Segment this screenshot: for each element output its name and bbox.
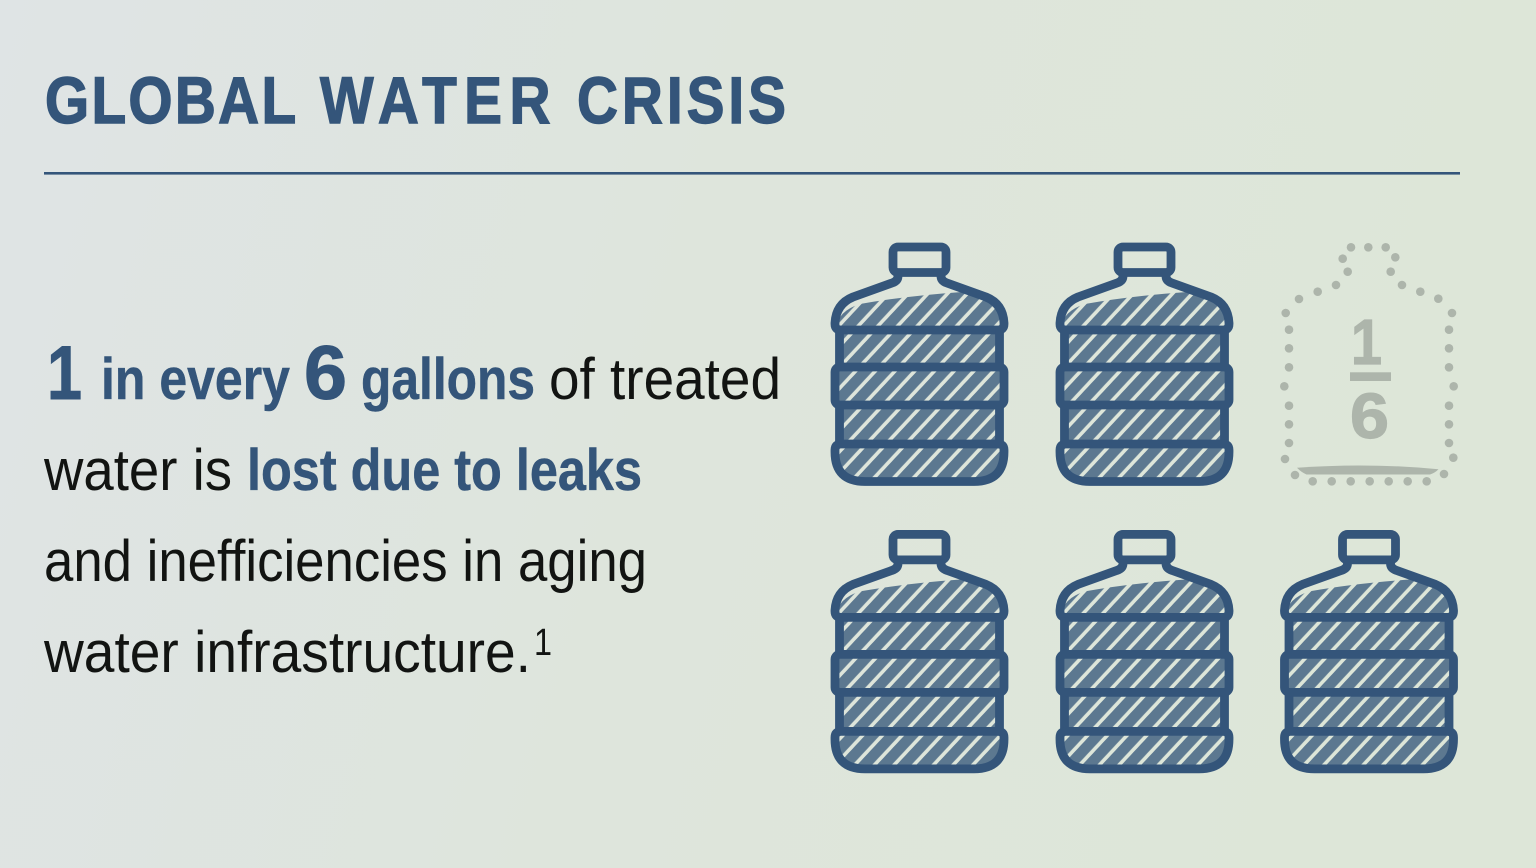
icon: dotted empty bottle with one sixth label bbox=[1280, 243, 1458, 486]
title: CRISIS bbox=[577, 64, 786, 138]
line 2: water is lost due to leaks: water is bbox=[43, 438, 232, 503]
line 1: 1 in every 6 gallons of treated: 6 bbox=[304, 331, 347, 416]
icon: full bottle 1 bbox=[835, 247, 1004, 482]
icon: full bottle 2 bbox=[1060, 247, 1229, 482]
line 2: water is lost due to leaks: lost due to leaks bbox=[247, 438, 642, 503]
pictogram: six water bottles, one missing bbox=[835, 243, 1458, 769]
line 1: 1 in every 6 gallons of treated: of treated bbox=[549, 347, 781, 412]
icon: full bottle 5 bbox=[1060, 534, 1229, 769]
icon: full bottle 4 bbox=[835, 534, 1004, 769]
line 1: 1 in every 6 gallons of treated: 1 bbox=[47, 331, 82, 416]
line 1: 1 in every 6 gallons of treated: gallons bbox=[361, 347, 535, 412]
statistic text block bbox=[43, 331, 781, 685]
title: WATER bbox=[320, 64, 550, 138]
title: GLOBAL bbox=[45, 64, 296, 138]
line 3: and inefficiencies in aging bbox=[44, 529, 647, 594]
line 4 with footnote: 1 bbox=[534, 622, 552, 664]
line 2: water is lost due to leaks bbox=[43, 438, 642, 503]
title bbox=[45, 64, 786, 138]
line 4 with footnote: water infrastructure. bbox=[43, 620, 531, 685]
line 1: 1 in every 6 gallons of treated bbox=[47, 331, 781, 416]
line 1: 1 in every 6 gallons of treated: in every bbox=[101, 347, 290, 412]
icon: dotted empty bottle with one sixth label: 6 bbox=[1350, 380, 1389, 452]
icon: dotted empty bottle with one sixth label: 1 bbox=[1351, 306, 1382, 378]
icon: full bottle 6 bbox=[1284, 534, 1454, 769]
